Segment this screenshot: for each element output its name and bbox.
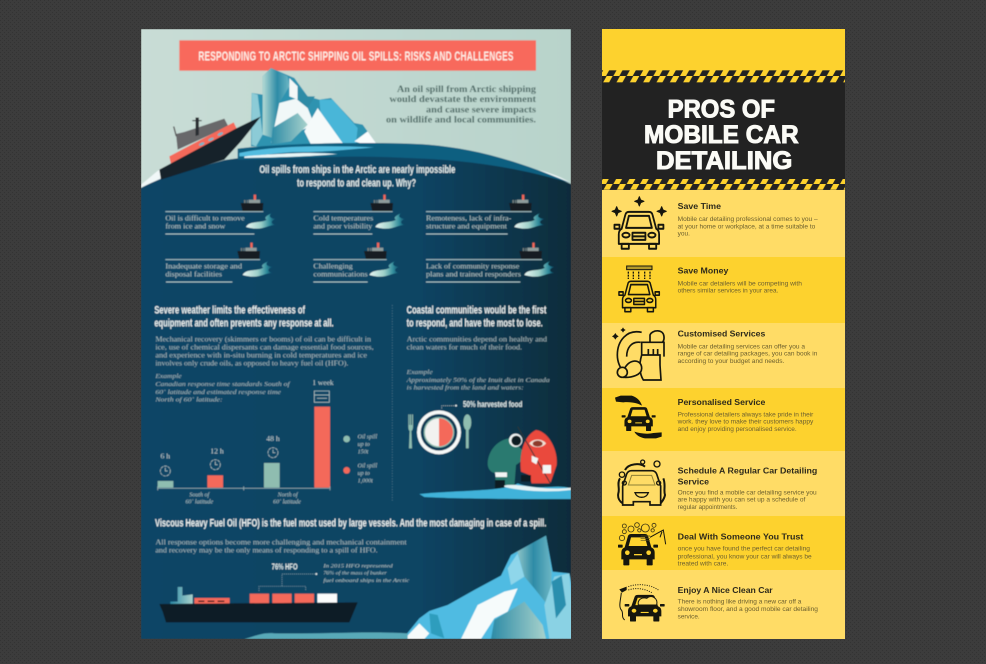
plate chart: 50% harvested food: 50% harvested food	[463, 400, 522, 409]
chart legend: Oil spill	[358, 435, 377, 441]
plate chart: 50% harvested food	[408, 400, 522, 454]
text: mechanical recovery: ice, use of chemical dispersants can damage essential food sources,	[155, 344, 374, 352]
reason: oil difficult to remove: Oil is difficult to remove	[165, 215, 245, 223]
chart legend	[343, 435, 377, 484]
heading: coastal communities: Coastal communities would be the first	[407, 304, 547, 316]
intro text: An oil spill from Arctic shipping	[397, 84, 537, 94]
text: arctic communities	[407, 336, 548, 351]
item: deal with someone you trust: professional, you know your car will always be	[678, 553, 812, 560]
reason: oil difficult to remove: from ice and snow	[165, 223, 226, 231]
intro text: and cause severe impacts	[426, 104, 537, 114]
item: personalised service: Personalised Service	[678, 398, 766, 407]
reason: remoteness: structure and equipment	[426, 223, 507, 231]
item: deal with someone you trust	[678, 533, 812, 567]
item: save time: at your home or workplace, at a time suitable to	[678, 223, 816, 230]
section: severe weather and coastal communities	[154, 304, 571, 505]
text: mechanical recovery: Mechanical recovery (skimmers or booms) of oil can be difficult in	[155, 336, 372, 344]
title: MOBILE CAR	[644, 122, 799, 149]
reason: cold temperatures	[313, 195, 405, 234]
bar chart: response times: North of	[277, 491, 299, 498]
icon: hand washing car	[612, 327, 664, 380]
title	[644, 96, 799, 175]
item: enjoy a nice clean car: There is nothing like driving a new car off a	[678, 599, 802, 606]
text: canadian example: 60˚ latitude and estimated response time	[155, 389, 281, 396]
sea heading: Oil spills from ships in the Arctic are nearly impossible	[259, 164, 455, 176]
callout: 76% HFO: In 2015 HFO represented	[322, 564, 393, 570]
bar chart: response times: South of	[189, 491, 211, 498]
item: schedule a regular car detailing service: Once you find a mobile car detailing service you	[678, 489, 817, 496]
chart legend: Oil spill	[358, 464, 377, 470]
bar chart: response times	[158, 378, 334, 505]
item: save time	[678, 202, 818, 238]
section: header, iceberg and ship	[141, 40, 571, 282]
item: save time: Mobile car detailing professional comes to you –	[678, 216, 818, 223]
text: inuit example: Approximately 50% of the Inuit diet in Canada	[406, 377, 550, 384]
chart legend: 1,000t	[358, 478, 373, 484]
item: deal with someone you trust: Deal With Someone You Trust	[678, 533, 804, 542]
section: items 5 to 7	[618, 460, 819, 622]
bar chart: response times: 6 h	[161, 452, 170, 461]
intro text: would devastate the environment	[389, 94, 536, 104]
heading: coastal communities: to respond, and have the most to lose.	[407, 318, 543, 330]
item: schedule a regular car detailing service	[678, 467, 817, 511]
panel background: sea ice	[141, 29, 571, 189]
item: save money: Save Money	[678, 267, 729, 276]
item: customised services: Mobile car detailing services can offer you a	[678, 343, 806, 350]
chart legend: 150t	[358, 450, 369, 456]
text: inuit example: Example	[406, 369, 433, 376]
reason: inadequate storage	[165, 243, 273, 282]
item: customised services	[678, 330, 818, 365]
item: customised services: Customised Services	[678, 330, 766, 339]
reason: lack of community response: Lack of community response	[426, 263, 519, 271]
sea heading: to respond to and clean up. Why?	[297, 177, 416, 189]
section: heavy fuel oil	[155, 518, 572, 639]
callout: 76% HFO: fuel onboard ships in the Arctic	[323, 577, 410, 584]
bar chart: response times: 60˚ latitude	[273, 498, 301, 505]
text: inuit example	[406, 369, 550, 392]
title banner: RESPONDING TO ARCTIC SHIPPING OIL SPILLS: RISKS AND CHALLENGES	[198, 49, 514, 64]
callout: 76% HFO	[259, 562, 410, 591]
intro text	[386, 84, 537, 125]
reason: remoteness	[426, 195, 544, 234]
illustration: tanker with cargo	[159, 587, 358, 622]
bar chart: response times: 12 h	[210, 446, 224, 455]
panel: sea area	[141, 153, 571, 639]
bar chart: response times: 48 h	[266, 434, 280, 443]
reason: remoteness: Remoteness, lack of infra-	[426, 215, 512, 223]
item: save time: Save Time	[678, 202, 722, 211]
icon: car under shower	[619, 266, 659, 312]
text: mechanical recovery: involves only crude oils, as opposed to heavy fuel oil (HFO).	[155, 359, 349, 367]
item: schedule a regular car detailing service: Schedule A Regular Car Detailing	[678, 467, 817, 476]
heading: coastal communities	[407, 304, 547, 330]
item: schedule a regular car detailing service: are happy with you can set up a schedule of	[678, 497, 806, 504]
section: items 2 to 4	[612, 266, 818, 438]
reason: challenging communications	[313, 243, 399, 282]
item: enjoy a nice clean car: showroom floor, and a good mobile car detailing	[678, 606, 819, 613]
item: deal with someone you trust: treated with care.	[678, 560, 729, 567]
intro text: on wildlife and local communities.	[386, 115, 536, 125]
item: save money: Mobile car detailers will be competing with	[678, 281, 803, 288]
item: enjoy a nice clean car	[678, 586, 819, 620]
illustration: inuit people fishing on ice	[419, 427, 571, 499]
text: mechanical recovery	[155, 336, 374, 367]
iceberg illustration	[251, 68, 376, 148]
heading: heavy fuel oil: Viscous Heavy Fuel Oil (HFO) is the fuel most used by large vessels. And the most damaging in case of a spill.	[155, 518, 546, 530]
text: arctic communities: Arctic communities depend on healthy and	[407, 336, 548, 344]
item: deal with someone you trust: once you have found the perfect car detailing	[678, 546, 811, 553]
illustration: iceberg bottom right	[244, 536, 572, 639]
panel background bands	[602, 29, 845, 639]
text: inuit example: is harvested from the land and waters:	[407, 385, 524, 392]
heading: severe weather: equipment and often prevents any response at all.	[154, 318, 334, 330]
callout: 76% HFO: 76% HFO	[272, 562, 298, 571]
text: canadian example	[154, 373, 291, 404]
hazard stripes	[602, 70, 845, 190]
text: response options	[155, 538, 407, 554]
item: save money: others similar services in your area.	[678, 288, 779, 295]
heading: severe weather: Severe weather limits the effectiveness of	[154, 304, 305, 316]
text: mechanical recovery: and experience with in-situ burning in cold temperatures and ice	[155, 352, 367, 360]
heading: severe weather	[154, 304, 334, 330]
sea heading	[259, 164, 455, 189]
item: enjoy a nice clean car: Enjoy A Nice Clean Car	[678, 586, 773, 595]
panel: arctic shipping oil spills infographic	[141, 29, 572, 639]
item: personalised service: and enjoy providing personalised service.	[678, 426, 797, 433]
item: personalised service	[677, 398, 814, 433]
item: customised services: range of car detailing packages, you can book in	[678, 351, 818, 358]
item: schedule a regular car detailing service: Service	[678, 477, 710, 486]
bar chart: response times: 60˚ latitude	[185, 498, 214, 505]
dotted divider	[391, 305, 393, 502]
item: personalised service: Professional detailers always take pride in their	[678, 411, 813, 418]
reason: challenging communications: Challenging	[313, 263, 353, 271]
chart legend: up to	[358, 471, 370, 477]
title banner	[179, 40, 536, 71]
list of reasons	[165, 195, 554, 282]
item: save money	[678, 267, 803, 295]
reason: cold temperatures: Cold temperatures	[313, 215, 374, 223]
icon: car being sprayed clean	[619, 585, 665, 622]
title: DETAILING	[656, 148, 792, 175]
chart legend: up to	[358, 442, 370, 448]
icon: car with bubbles and sprayer	[618, 523, 666, 565]
icon: car between hands	[615, 396, 662, 438]
item: personalised service: work. they love to make their customers happy	[677, 419, 814, 426]
reason: lack of community response	[426, 243, 554, 282]
item: customised services: according to your budget and needs.	[678, 358, 785, 365]
water and ice floe line	[141, 143, 571, 187]
ship illustration	[159, 116, 261, 180]
section: header and item 1	[602, 70, 845, 249]
callout: 76% HFO: 76% of the mass of bunker	[323, 569, 388, 576]
item: schedule a regular car detailing service: regular appointments.	[678, 504, 738, 511]
text: response options: All response options become more challenging and mechanical containment	[155, 538, 407, 546]
item: save time: you.	[678, 231, 690, 238]
text: canadian example: Canadian response time standards South of	[155, 381, 291, 388]
text: arctic communities: clean waters for much of their food.	[407, 343, 522, 351]
reason: inadequate storage: Inadequate storage and	[165, 263, 243, 271]
text: response options: and recovery may be the only means of responding to a spill of HFO.	[155, 546, 378, 554]
bar chart: response times: 1 week	[312, 378, 334, 387]
icon: car with sparkles	[612, 197, 666, 249]
text: canadian example: North of 60˚ latitude:	[154, 397, 223, 404]
reason: oil difficult to remove	[165, 195, 276, 234]
reason: inadequate storage: disposal facilities	[165, 271, 222, 279]
text: canadian example: Example	[154, 373, 182, 380]
item: enjoy a nice clean car: service.	[678, 613, 700, 620]
icon: soapy car	[618, 460, 665, 505]
title: PROS OF	[668, 96, 775, 123]
reason: cold temperatures: and poor visibility	[313, 223, 373, 231]
reason: challenging communications: communications	[313, 271, 368, 279]
panel: pros of mobile car detailing	[602, 29, 845, 639]
reason: lack of community response: plans and trained responders	[426, 271, 521, 279]
